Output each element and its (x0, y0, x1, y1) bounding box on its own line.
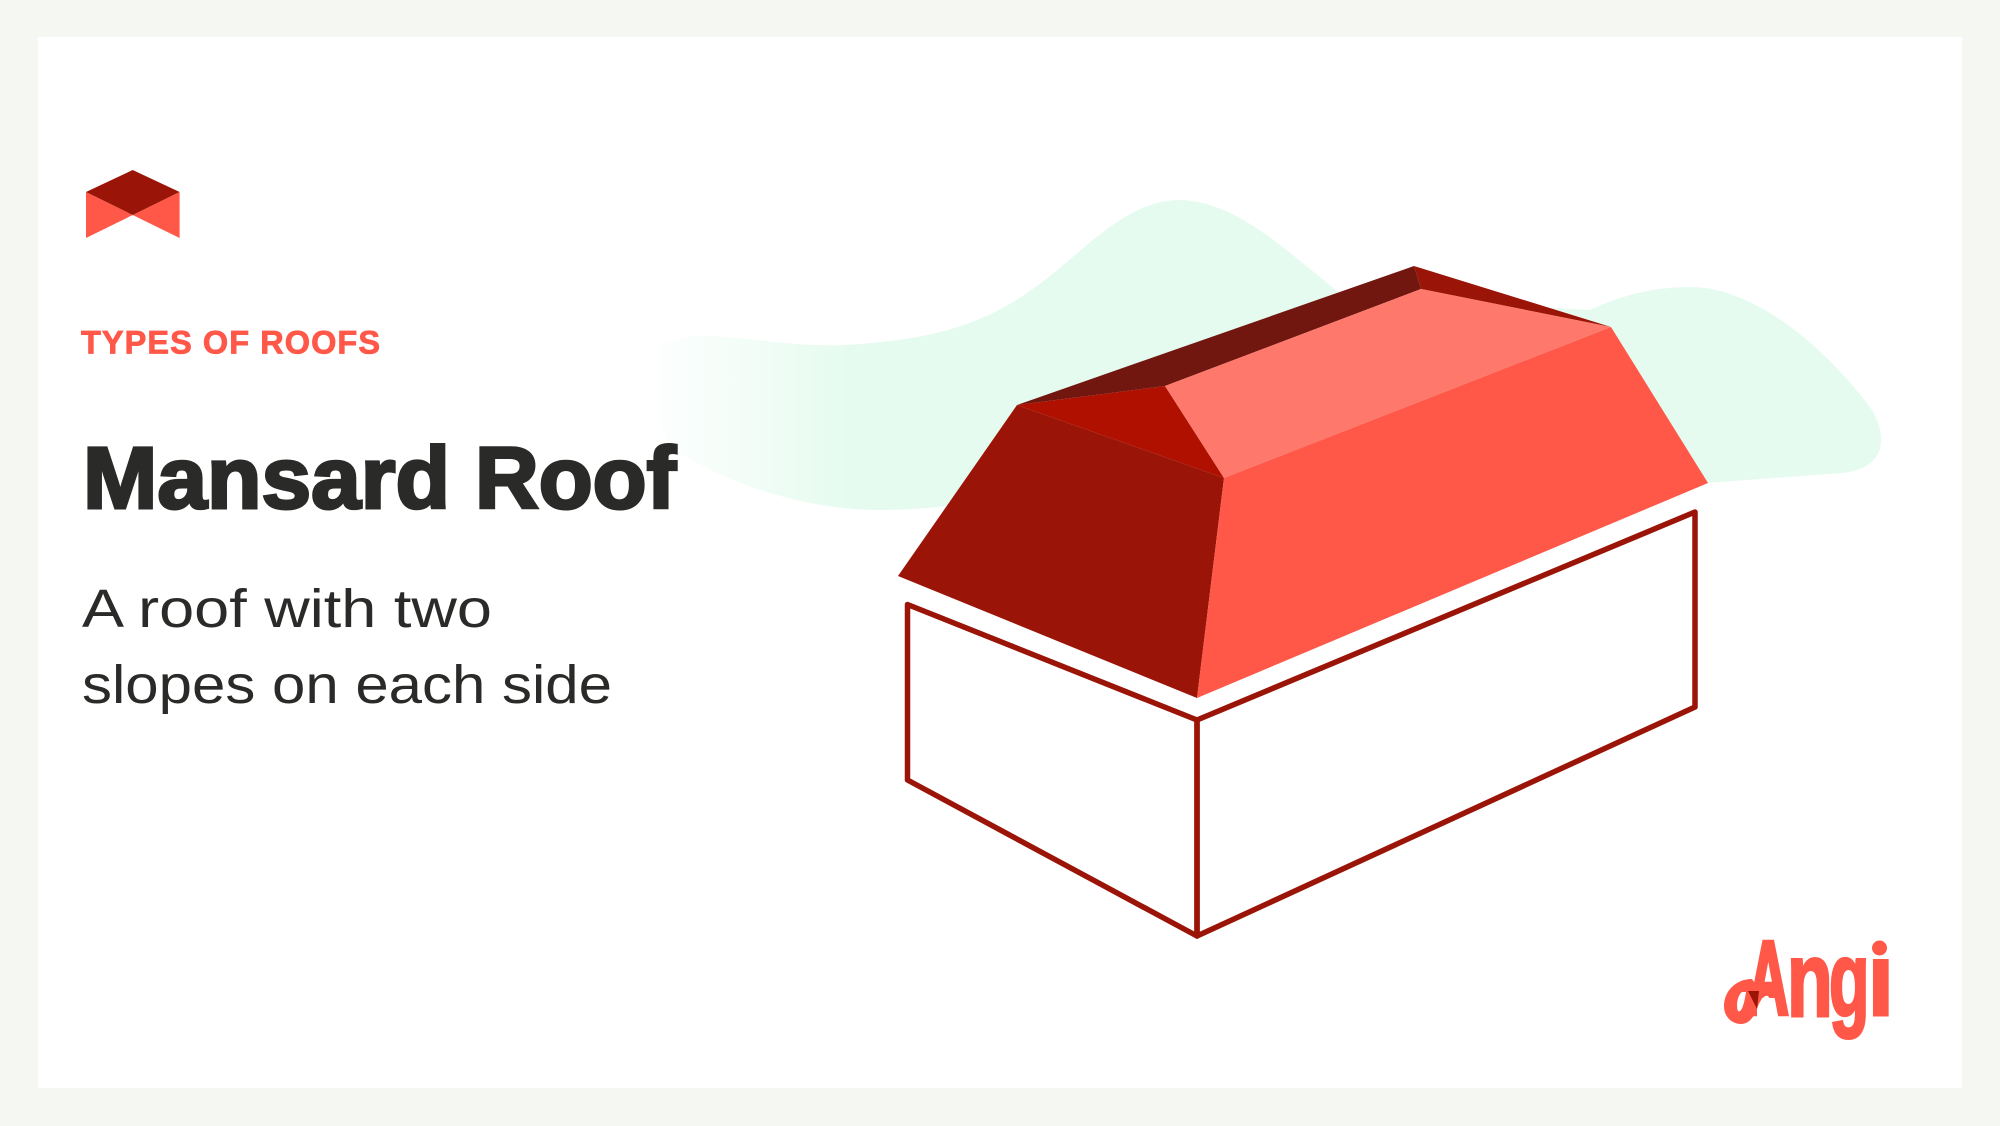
roof: front upper slope (1165, 289, 1611, 478)
logo: Angi: n (1787, 919, 1833, 1039)
eyebrow label: TYPES OF ROOFS (81, 324, 380, 360)
description text (82, 579, 612, 715)
description text: slopes on each side (82, 655, 612, 715)
description text: A roof with two (82, 579, 492, 639)
icon: roof logo mark (86, 170, 180, 238)
logo: Angi: A (1748, 919, 1789, 1036)
roof: left end upper slope (1017, 386, 1224, 478)
heading (83, 430, 677, 527)
logo: Angi: i (1866, 919, 1896, 1039)
roof: right end sliver (1414, 266, 1611, 327)
house walls outline (908, 512, 1695, 936)
roof: rear dark ridge (1017, 266, 1421, 405)
heading: Roof (475, 430, 677, 527)
logo: Angi (1724, 919, 1896, 1039)
logo: Angi: g (1829, 919, 1870, 1039)
mansard roof illustration (898, 266, 1708, 698)
heading: Mansard (83, 430, 450, 527)
background blob (653, 200, 1881, 510)
roof: left end lower slope (898, 405, 1224, 698)
roof: front lower slope (1197, 327, 1708, 698)
